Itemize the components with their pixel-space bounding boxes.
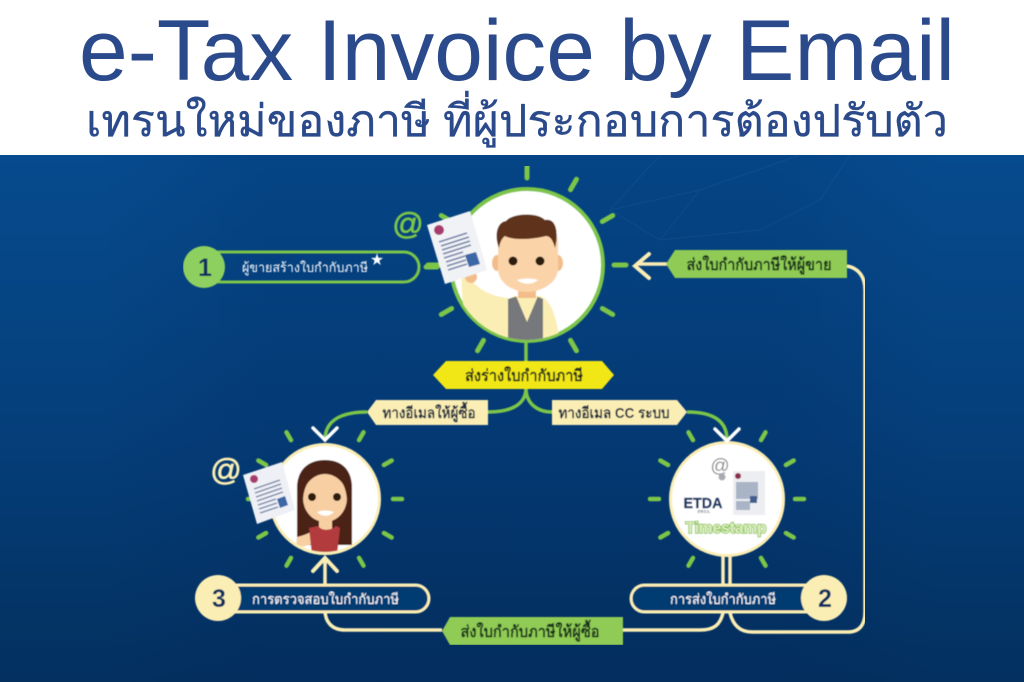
circle: ETDA timestamp system: Timestamp xyxy=(686,520,767,537)
step 2 label: การส่งใบกำกับภาษี xyxy=(670,591,776,607)
step 3 label: การตรวจสอบใบกำกับภาษี xyxy=(252,591,399,607)
rays: system circle xyxy=(650,432,804,566)
step 1 label xyxy=(183,246,419,288)
ray: seller left ray xyxy=(426,264,437,270)
step 2 label xyxy=(631,575,847,621)
label: send tax invoice to seller xyxy=(666,250,847,278)
chevron: arrow into seller from right xyxy=(635,254,649,278)
circle: buyer illustration xyxy=(270,444,380,555)
rays: buyer circle xyxy=(248,432,402,566)
step 2 label: 2 xyxy=(818,585,832,613)
step 3 label: 3 xyxy=(212,585,226,613)
circle: seller illustration xyxy=(451,189,603,341)
label: by email cc system: ทางอีเมล CC ระบบ xyxy=(558,405,670,422)
circle: ETDA timestamp system xyxy=(670,442,784,556)
icon: buyer tax invoice document xyxy=(243,462,295,524)
connector: from system back to seller and to buyer xyxy=(325,264,865,632)
step 1 label: ผู้ขายสร้างใบกำกับภาษี xyxy=(242,260,368,276)
subtitle: เทรนใหม่ของภาษี ที่ผู้ประกอบการต้องปรับตัว xyxy=(86,90,948,148)
label: send draft tax invoice: ส่งร่างใบกำกับภาษี xyxy=(465,366,583,385)
connector: seller to yellow label and branches xyxy=(325,340,727,440)
icon: seller email at sign: @ xyxy=(392,206,424,241)
icon: seller tax invoice document xyxy=(427,211,487,284)
icon: buyer email at sign: @ xyxy=(210,452,242,487)
chevron: arrow into system circle xyxy=(715,429,739,441)
label: send tax invoice to buyer xyxy=(442,617,623,645)
circle: ETDA timestamp system: ETDA xyxy=(684,495,723,512)
chevron: arrow into buyer from below xyxy=(313,558,337,571)
label: by email to buyer: ทางอีเมลให้ผู้ซื้อ xyxy=(382,401,476,423)
label: by email to buyer xyxy=(367,400,488,425)
label: send draft tax invoice xyxy=(433,361,614,389)
label: send tax invoice to seller: ส่งใบกำกับภาษีให้ผู้ขาย xyxy=(686,255,832,276)
diagram: seller, buyer and system flow xyxy=(183,166,865,645)
rays: seller circle xyxy=(428,166,626,351)
label: send tax invoice to buyer: ส่งใบกำกับภาษีให้ผู้ซื้อ xyxy=(460,619,600,643)
step 3 label xyxy=(195,575,429,621)
title: e-Tax Invoice by Email xyxy=(79,3,955,99)
step 1 label: ★ xyxy=(370,252,384,267)
circle: ETDA timestamp system: สพธอ. xyxy=(697,509,711,515)
chevron: arrow into buyer circle xyxy=(313,428,337,440)
circle: ETDA timestamp system: @ xyxy=(710,456,730,477)
label: by email cc system xyxy=(552,400,687,425)
step 1 label: 1 xyxy=(198,254,212,282)
panel: blue diagram background xyxy=(0,155,1024,682)
